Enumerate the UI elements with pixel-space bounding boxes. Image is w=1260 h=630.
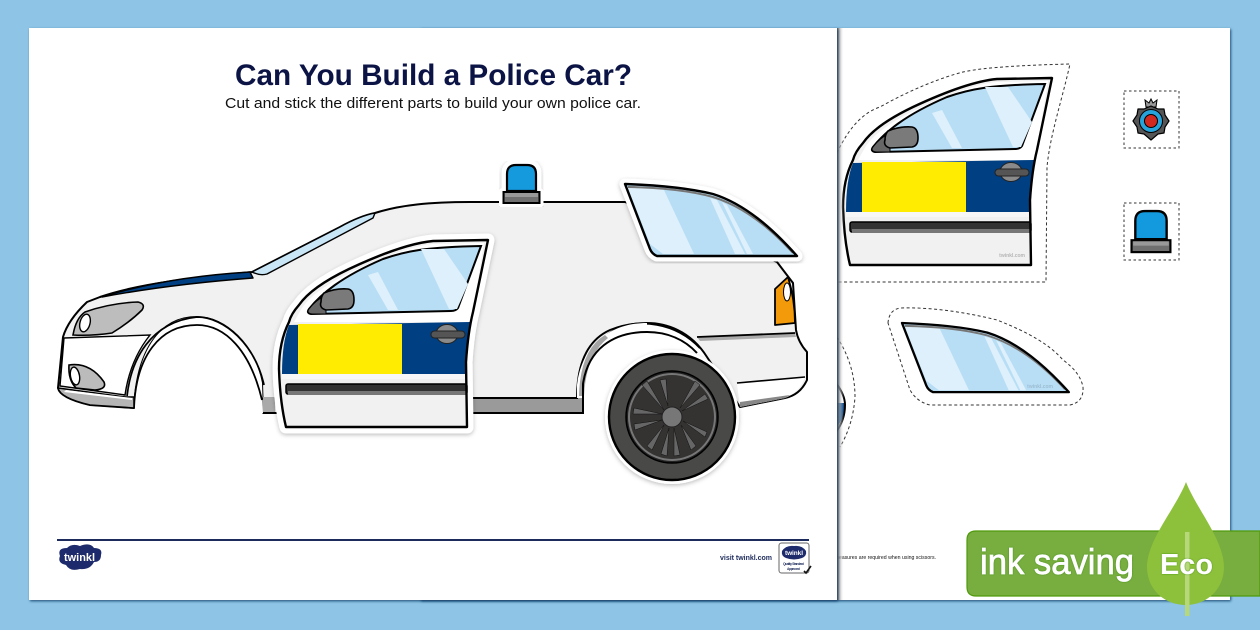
badge: ink saving eco xyxy=(967,482,1260,616)
cut-out: beacon in dashed box xyxy=(1124,203,1179,260)
front wheel arch xyxy=(134,317,263,450)
banner xyxy=(967,531,1260,596)
icon: leaf drop xyxy=(1147,482,1224,616)
rear light xyxy=(775,277,795,325)
panel: main worksheet xyxy=(29,28,837,600)
icon: headlight xyxy=(73,302,143,335)
watermark: door: twinkl.com xyxy=(999,253,1026,259)
footer link: visit twinkl.com xyxy=(720,555,772,562)
sticker: beacon xyxy=(503,165,540,203)
sheet shadow xyxy=(837,28,844,600)
front lower panel xyxy=(60,335,150,395)
title: Can You Build a Police Car? xyxy=(235,59,632,92)
logo: twinkl xyxy=(59,544,101,570)
rear lower bumper xyxy=(697,333,796,341)
sticker: door xyxy=(279,240,488,427)
banner label: ink saving xyxy=(980,541,1134,582)
logo: approved badge: Approved xyxy=(787,567,800,571)
logo: approved badge xyxy=(779,543,811,573)
cut-out: rear window xyxy=(888,308,1083,405)
icon: police badge xyxy=(1133,99,1169,140)
footer rule xyxy=(57,539,809,541)
sticker: rear window xyxy=(625,184,797,256)
eco label: Eco xyxy=(1160,549,1213,581)
hood stripe xyxy=(102,272,253,297)
cut-out: wheel edge xyxy=(836,337,855,447)
logo: twinkl: twinkl xyxy=(64,552,95,564)
cut-out: door xyxy=(837,64,1070,282)
car illustration xyxy=(58,165,807,484)
watermark: window: twinkl.com xyxy=(1027,384,1054,390)
icon: fog light xyxy=(69,365,105,390)
windscreen strip xyxy=(252,213,375,275)
logo: approved badge: twinkl xyxy=(785,550,803,557)
sticker: wheel xyxy=(605,350,739,484)
subtitle: Cut and stick the different parts to build your own police car. xyxy=(225,96,641,112)
panel: cut-out sheet xyxy=(420,28,1230,600)
wheel spokes xyxy=(633,379,708,456)
safety note: Adult supervision and safety measures are required when using scissors. xyxy=(768,555,936,561)
car body xyxy=(58,202,807,450)
cut-out: badge in dashed box xyxy=(1124,91,1179,148)
logo: approved badge: Quality Standard xyxy=(783,562,804,566)
